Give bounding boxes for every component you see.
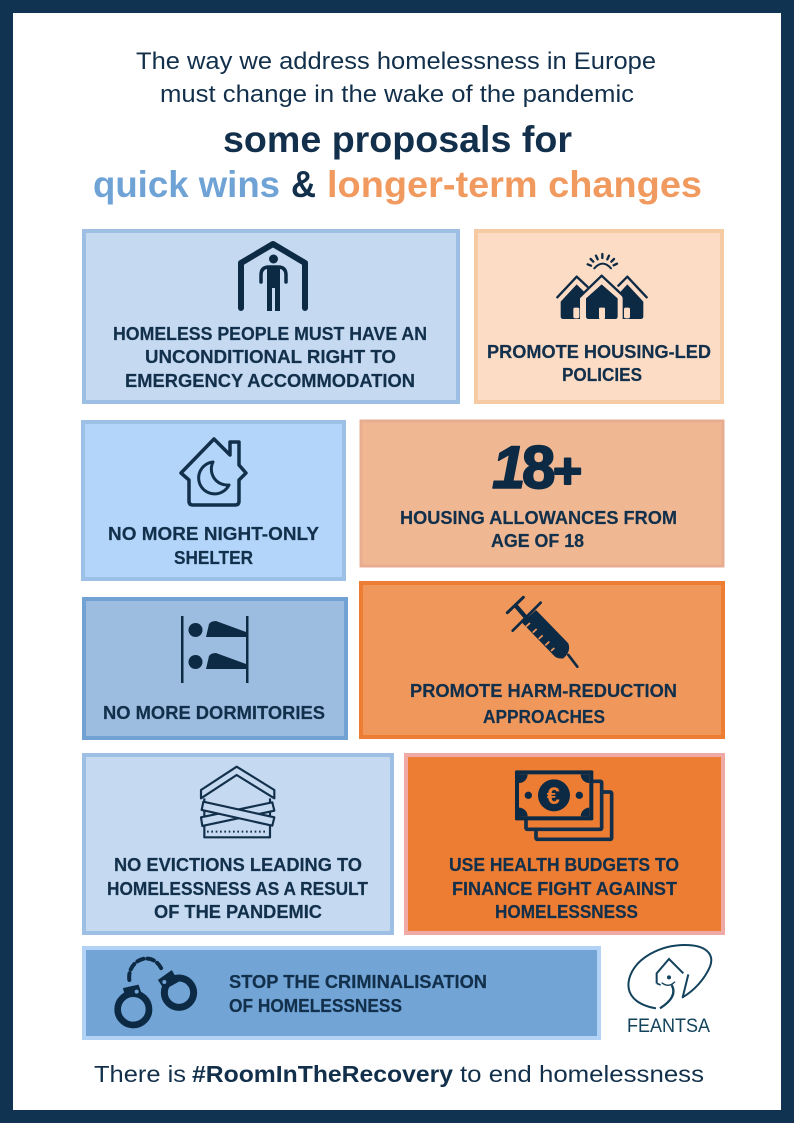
text: EMERGENCY ACCOMMODATION: [125, 371, 415, 391]
icon: houses with sun: [557, 254, 647, 319]
title: intro text: The way we address homelessness in Europe: [136, 48, 656, 75]
text: [410, 681, 677, 727]
heading: [93, 119, 702, 205]
text: HOMELESSNESS: [495, 902, 638, 922]
icon: house with moon: [181, 439, 246, 505]
icon: euro banknotes: €: [547, 783, 560, 810]
footer tagline: #RoomInTheRecovery: [192, 1061, 453, 1087]
text: USE HEALTH BUDGETS TO: [449, 855, 679, 875]
text: HOUSING ALLOWANCES FROM: [400, 508, 677, 528]
panel: harm reduction: [361, 583, 723, 737]
icon: bunk beds: [181, 616, 248, 683]
text: UNCONDITIONAL RIGHT TO: [145, 347, 396, 367]
text: STOP THE CRIMINALISATION: [229, 972, 487, 992]
heading: quick wins: [93, 164, 280, 205]
text: [400, 508, 677, 551]
icon: handcuffs: [118, 959, 194, 1025]
heading: some proposals for: [223, 119, 572, 160]
text: NO EVICTIONS LEADING TO: [114, 855, 362, 875]
icon: euro banknotes: [515, 770, 612, 839]
panel: night-only shelter: [83, 422, 344, 579]
text: [113, 324, 427, 391]
text: HOMELESS PEOPLE MUST HAVE AN: [113, 324, 427, 344]
icon: boarded-up house: [201, 767, 274, 837]
icon: syringe: [507, 597, 577, 667]
panel: housing-led: [476, 231, 722, 402]
panel: housing allowances: [361, 421, 723, 566]
logo: FEANTSA: [627, 945, 711, 1037]
text: POLICIES: [562, 365, 642, 385]
text: AGE OF 18: [491, 531, 584, 551]
text: FINANCE FIGHT AGAINST: [452, 879, 677, 899]
footer tagline: There is: [94, 1061, 186, 1087]
icon: 18+: 8: [522, 434, 555, 501]
text: [487, 342, 711, 385]
text: HOMELESSNESS AS A RESULT: [107, 879, 368, 899]
text: NO MORE NIGHT-ONLY: [108, 524, 319, 544]
text: NO MORE DORMITORIES: [103, 703, 325, 723]
text: PROMOTE HARM-REDUCTION: [410, 681, 677, 701]
text: [229, 972, 487, 1016]
text: [107, 855, 368, 922]
text: [449, 855, 679, 922]
icon: 18+: +: [553, 443, 582, 499]
text: OF THE PANDEMIC: [154, 902, 322, 922]
icon: 18+: 1: [492, 434, 525, 501]
panel: emergency accommodation: [84, 231, 458, 402]
panel: dormitories: [84, 599, 346, 738]
panel: criminalisation: [84, 948, 599, 1038]
text: APPROACHES: [483, 707, 605, 727]
footer tagline: to end homelessness: [460, 1061, 704, 1087]
text: SHELTER: [174, 548, 253, 568]
heading: &: [291, 164, 316, 205]
title: intro text: [136, 48, 656, 108]
title: intro text: must change in the wake of the pandemic: [160, 81, 634, 108]
text: PROMOTE HOUSING-LED: [487, 342, 711, 362]
text: OF HOMELESSNESS: [229, 996, 402, 1016]
panel: health budgets: [406, 755, 723, 933]
icon: person in house: [241, 244, 305, 311]
icon: 18+: [492, 434, 582, 501]
footer tagline: [94, 1061, 704, 1087]
logo: FEANTSA: FEANTSA: [627, 1016, 710, 1037]
text: [108, 524, 319, 568]
panel: evictions: [84, 755, 392, 933]
heading: longer-term changes: [327, 164, 702, 205]
